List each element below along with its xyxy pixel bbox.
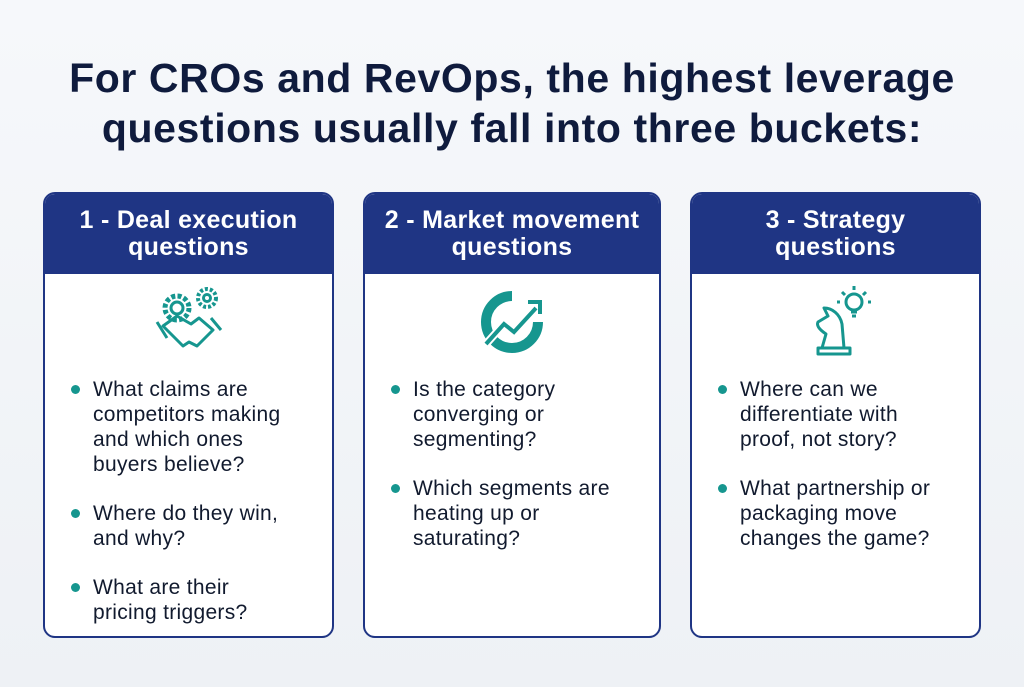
bullet list: Where can we <box>740 378 878 401</box>
title <box>69 55 955 151</box>
bullet list <box>391 378 610 550</box>
bullet list: competitors making <box>93 403 280 426</box>
bullet list: saturating? <box>413 527 520 550</box>
panel heading <box>692 194 979 274</box>
bullet list: proof, not story? <box>740 428 897 451</box>
title: For CROs and RevOps, the highest leverage <box>69 55 955 101</box>
bullet list: What claims are <box>93 378 248 401</box>
panel: strategy <box>690 192 981 638</box>
panel heading <box>365 194 659 274</box>
bullet list: packaging move <box>740 502 897 525</box>
panel heading: 2 - Market movement <box>385 206 639 234</box>
bullet list: and why? <box>93 527 185 550</box>
bullet list: Where do they win, <box>93 502 278 525</box>
bullet list: buyers believe? <box>93 453 245 476</box>
bullet list: converging or <box>413 403 544 426</box>
panel heading: 3 - Strategy <box>766 206 905 234</box>
bullet list: Is the category <box>413 378 555 401</box>
bullet list: differentiate with <box>740 403 898 426</box>
bullet list: What are their <box>93 576 229 599</box>
panel heading: questions <box>452 233 572 261</box>
panel heading: questions <box>128 233 249 261</box>
bullet list: Which segments are <box>413 477 610 500</box>
panel: deal execution <box>43 192 334 638</box>
bullet list: changes the game? <box>740 527 930 550</box>
title: questions usually fall into three buckets: <box>102 105 922 151</box>
bullet list: What partnership or <box>740 477 930 500</box>
bullet list <box>718 378 930 550</box>
bullet list <box>71 378 280 624</box>
bullet list: and which ones <box>93 428 243 451</box>
panel: market movement <box>363 192 661 638</box>
icon: growth chart <box>481 291 543 353</box>
panel heading: 1 - Deal execution <box>80 206 297 234</box>
bullet list: heating up or <box>413 502 540 525</box>
icon: gears handshake <box>156 287 222 348</box>
bullet list: pricing triggers? <box>93 601 248 624</box>
panel heading <box>45 194 332 274</box>
bullet list: segmenting? <box>413 428 537 451</box>
panel heading: questions <box>775 233 896 261</box>
icon: knight and bulb <box>816 286 871 356</box>
